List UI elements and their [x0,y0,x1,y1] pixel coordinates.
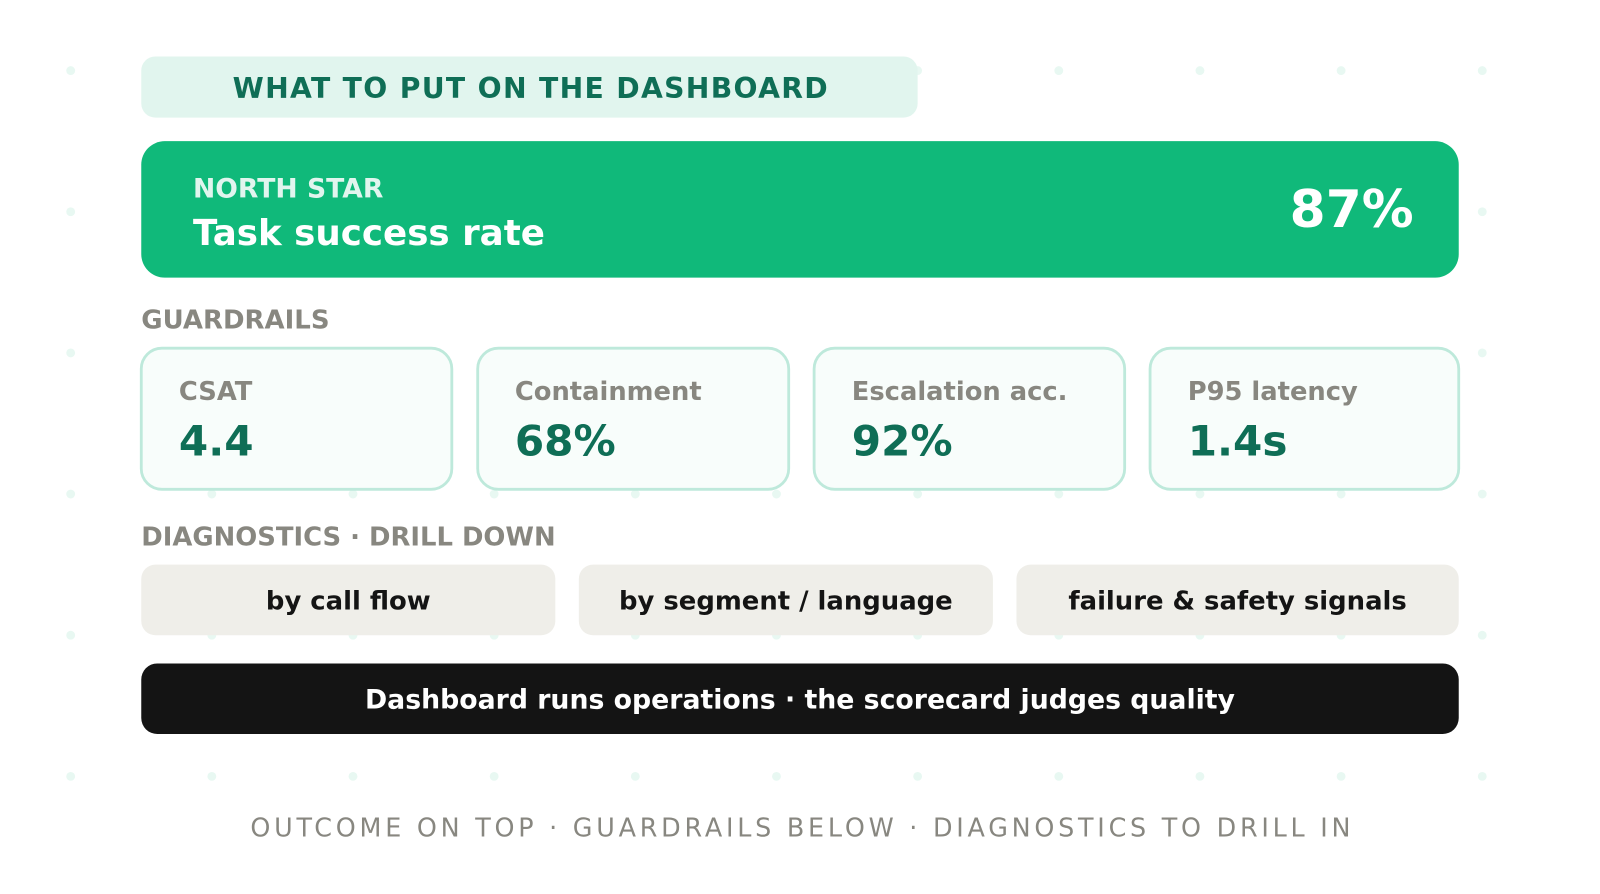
north star value: 87% [1290,180,1414,240]
north star label: NORTH STAR [193,174,383,205]
pill: failure and safety signals: failure & safety signals [1068,586,1407,616]
panel: diagnostics drill downs [141,565,1459,635]
pill: by call flow: by call flow [266,586,431,616]
card: escalation accuracy [814,348,1125,489]
card: containment: Containment [515,377,702,407]
pill: by call flow [141,565,555,635]
callout: dashboard vs scorecard [141,663,1459,734]
card: escalation accuracy: Escalation acc. [852,377,1067,407]
pill: by segment and language: by segment / language [619,586,953,616]
card: P95 latency [1150,348,1459,489]
title banner [141,56,918,118]
card: containment [478,348,789,489]
card: escalation accuracy: 92% [852,416,953,465]
panel: north star [141,141,1459,278]
card: CSAT [141,348,452,489]
heading: diagnostics: DIAGNOSTICS · DRILL DOWN [141,522,556,552]
card: P95 latency: P95 latency [1188,377,1358,407]
card: containment: 68% [515,416,616,465]
pill: failure and safety signals [1016,565,1459,635]
card: CSAT: CSAT [179,377,253,407]
pill: by segment and language [579,565,993,635]
panel: guardrail metrics [141,348,1459,489]
card: CSAT: 4.4 [179,416,254,465]
north star metric name: Task success rate [193,213,545,254]
card: P95 latency: 1.4s [1188,416,1287,465]
callout: dashboard vs scorecard: Dashboard runs operations · the scorecard judges quality [365,685,1235,716]
title banner: WHAT TO PUT ON THE DASHBOARD [233,72,829,105]
footer caption: OUTCOME ON TOP · GUARDRAILS BELOW · DIAGNOSTICS TO DRILL IN [250,813,1354,843]
heading: guardrails: GUARDRAILS [141,305,330,335]
